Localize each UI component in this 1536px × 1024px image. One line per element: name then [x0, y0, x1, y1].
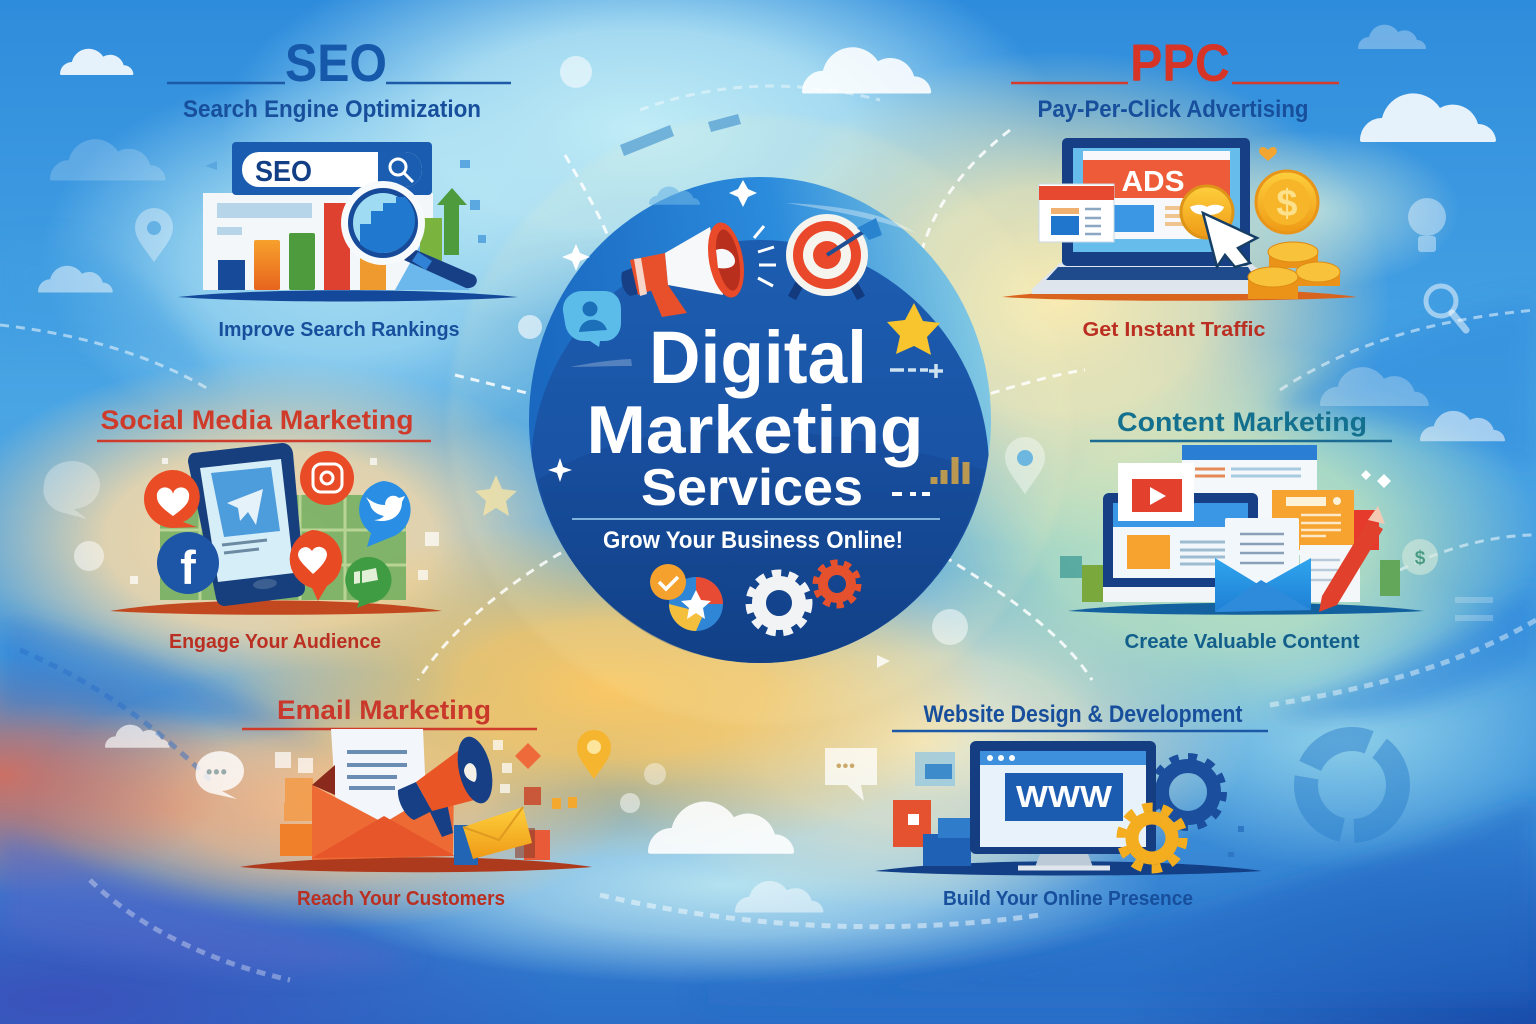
- icon: cloud in circle: [649, 187, 700, 205]
- heading: Social Media Marketing: [100, 405, 414, 435]
- heading: PPC: Pay-Per-Click Advertising: [1038, 96, 1308, 123]
- heading: PPC: [1011, 34, 1339, 123]
- main title: Digital: [649, 316, 867, 399]
- caption: Reach Your Customers: [297, 888, 505, 910]
- heading: SEO: [167, 34, 511, 123]
- tagline: Grow Your Business Online!: [603, 527, 903, 554]
- caption: Build Your Online Presence: [943, 888, 1193, 910]
- decorative circles and bars: [74, 56, 968, 813]
- map pin and side icons: $: [1415, 548, 1426, 569]
- icon: phone and social: f: [180, 541, 196, 594]
- icon: SEO search chart: [178, 142, 518, 302]
- heading: Website Design & Development: [924, 701, 1243, 728]
- icon: envelope and megaphone: [240, 729, 592, 872]
- icon: person bubble: [563, 291, 621, 347]
- panel: Website Design & Development: [875, 701, 1268, 910]
- map pin and side icons: •••: [206, 762, 228, 782]
- central circle: [529, 177, 991, 698]
- icon: laptop with ads and coins: $: [1276, 183, 1298, 225]
- icon: laptop with ads and coins: [1002, 138, 1357, 301]
- icon: star: [887, 303, 940, 355]
- icon: SEO search chart: SEO: [255, 156, 312, 188]
- heading: PPC: PPC: [1130, 34, 1230, 93]
- map pin and side icons: [43, 198, 1493, 831]
- main title: Services: [641, 459, 863, 517]
- icon: gears: [750, 563, 858, 632]
- heading: SEO: SEO: [285, 34, 387, 93]
- caption: Create Valuable Content: [1124, 631, 1360, 653]
- panel: Email Marketing: [240, 695, 592, 910]
- icon: www monitor and gears: WWW: [1016, 779, 1113, 814]
- caption: Improve Search Rankings: [218, 318, 460, 341]
- heading: Content Marketing: [1117, 407, 1367, 437]
- caption: Get Instant Traffic: [1082, 318, 1266, 341]
- icon: megaphone: [621, 220, 776, 317]
- panel: Content Marketing: [1060, 407, 1424, 653]
- icon: phone and social: [110, 443, 442, 615]
- main title: [586, 316, 924, 517]
- caption: Engage Your Audience: [169, 631, 381, 653]
- main title: Marketing: [586, 392, 924, 468]
- panel: PPC: [1002, 34, 1357, 341]
- icon: badges: [650, 564, 723, 631]
- icon: content stack: [1060, 445, 1424, 615]
- heading: Email Marketing: [277, 695, 491, 725]
- icon: target: [786, 214, 882, 298]
- panel: SEO: [167, 34, 518, 341]
- icon: www monitor and gears: [875, 741, 1262, 876]
- panel: Social Media Marketing: [97, 405, 442, 653]
- icon: laptop with ads and coins: ADS: [1122, 166, 1184, 198]
- heading: SEO: Search Engine Optimization: [183, 96, 481, 123]
- map pin and side icons: •••: [836, 758, 856, 775]
